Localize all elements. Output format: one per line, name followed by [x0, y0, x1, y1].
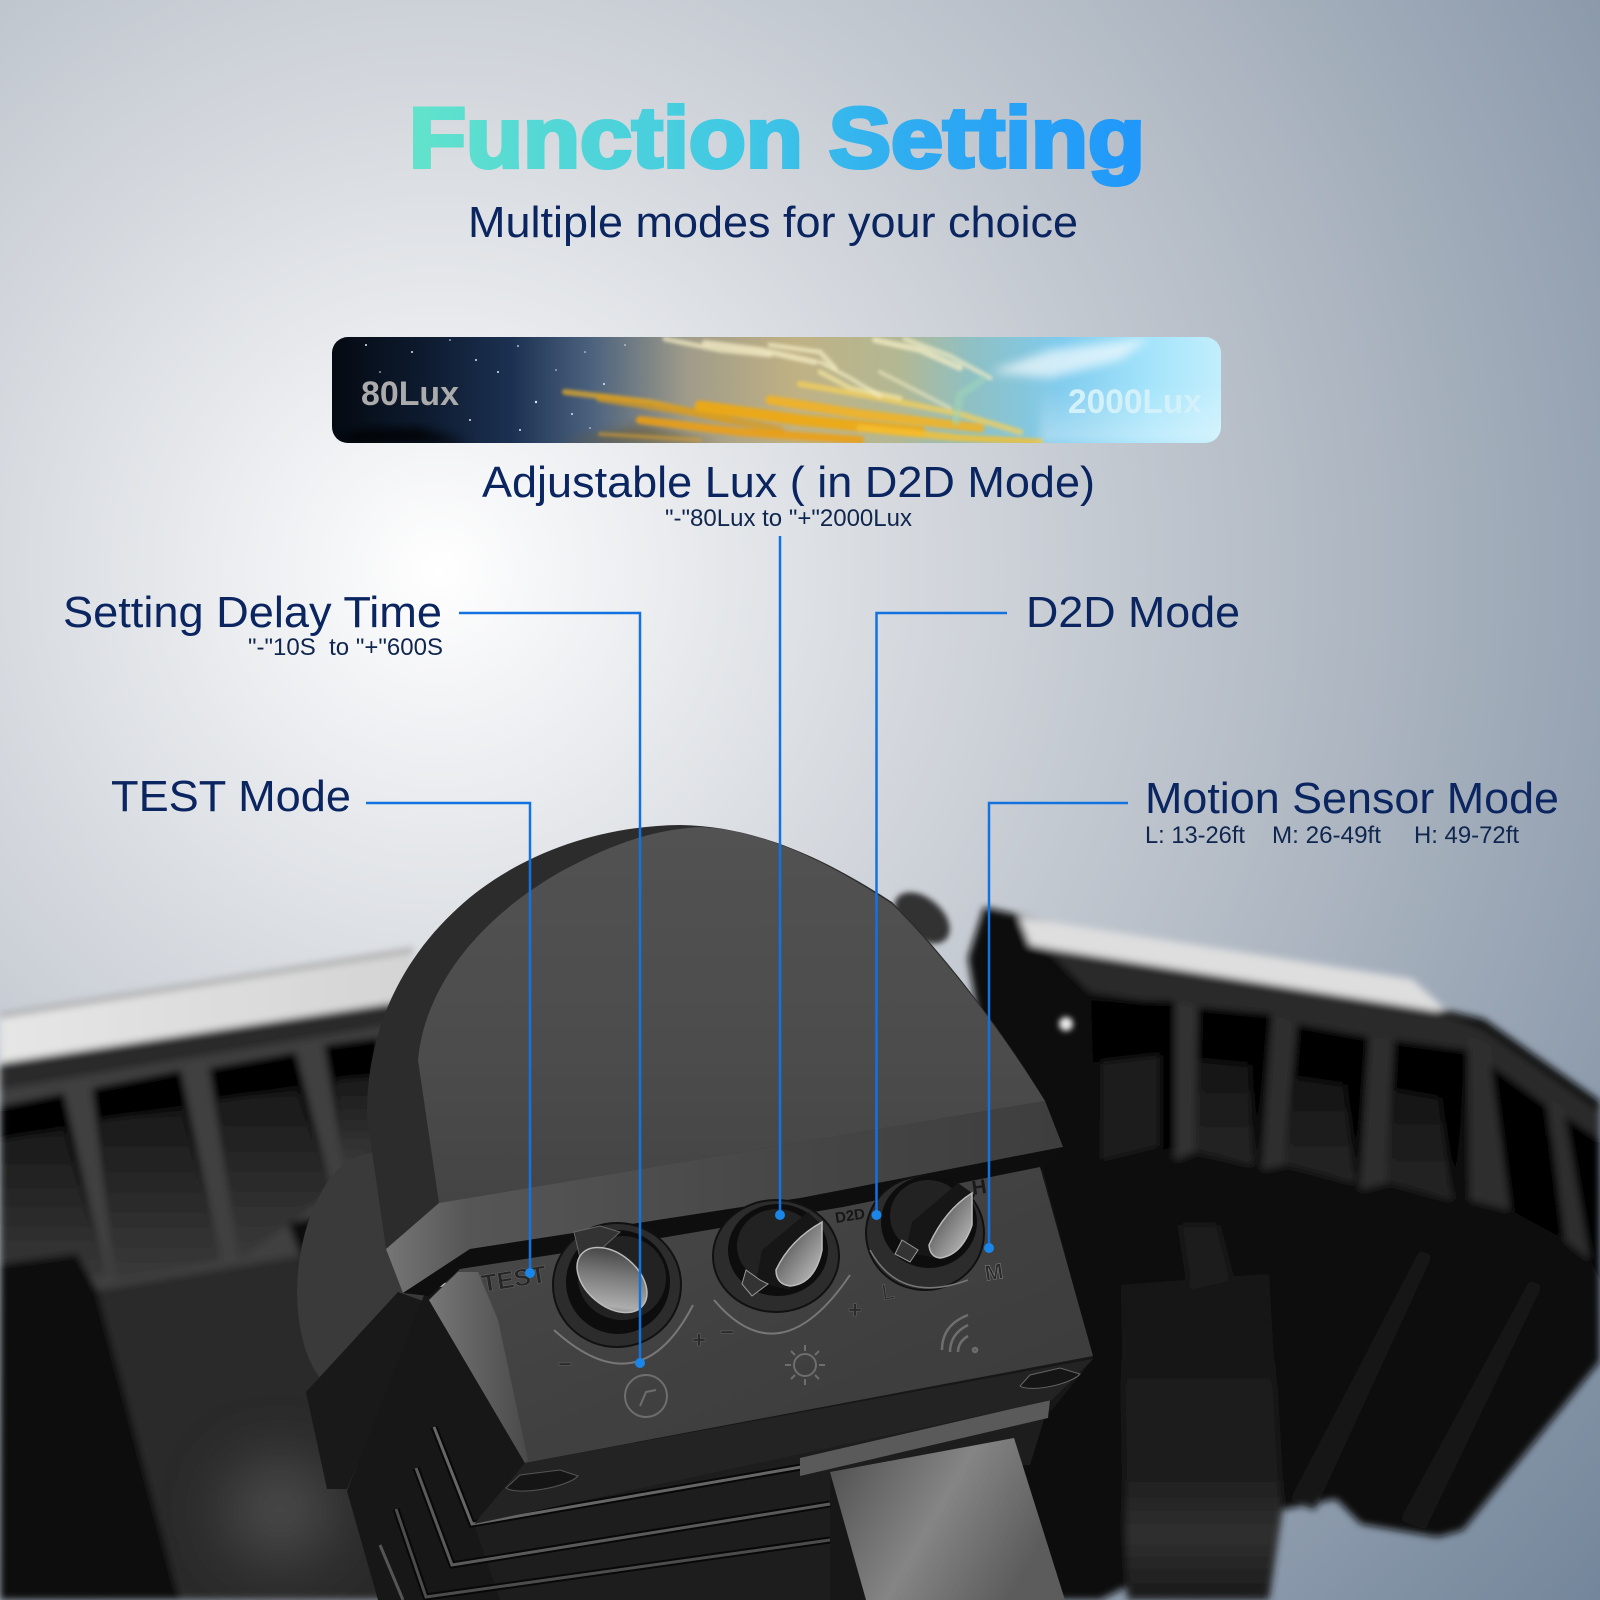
heading: adjustable lux: Adjustable Lux ( in D2D Mode) — [482, 458, 1095, 507]
heading: setting delay time: Setting Delay Time — [63, 588, 442, 637]
dome face — [418, 827, 1045, 1203]
left bracket highlight — [225, 1460, 335, 1560]
golden cloud streaks — [565, 372, 1040, 442]
motion sensor housing — [286, 825, 1093, 1600]
heading: adjustable lux — [482, 458, 1095, 532]
control panel — [429, 1167, 1093, 1463]
heading: test mode: TEST Mode — [111, 772, 351, 821]
rear disc — [286, 1147, 438, 1403]
lower rail — [800, 1400, 1050, 1476]
panel markings: − — [720, 1319, 734, 1346]
hood band — [386, 1101, 1063, 1293]
darker lower sky — [560, 425, 720, 443]
heading: adjustable lux: "-"80Lux to "+"2000Lux — [665, 505, 912, 532]
heading: d2d mode: D2D Mode — [1026, 588, 1240, 637]
stars — [365, 339, 626, 431]
panel markings: TEST — [480, 1261, 548, 1298]
bolt highlight — [1059, 1017, 1073, 1031]
panel bevel — [429, 1272, 528, 1463]
panel lip — [474, 1359, 1093, 1524]
heading: motion sensor mode: Motion Sensor Mode — [1145, 774, 1559, 823]
panel markings: − — [558, 1351, 572, 1378]
small bump behind dome — [885, 882, 959, 954]
panel markings: + — [848, 1297, 862, 1324]
panel markings: H — [970, 1176, 988, 1200]
white cloud wisps — [665, 339, 990, 408]
mounting stem — [830, 1438, 1065, 1600]
left floodlight (blurred) — [0, 948, 440, 1600]
panel markings: + — [692, 1327, 706, 1354]
line: motion sensor — [989, 803, 1128, 1248]
knob 1: delay time — [553, 1223, 693, 1364]
line: delay time — [459, 613, 640, 1363]
dome outer — [367, 825, 1063, 1293]
line: d2d — [876, 613, 1007, 1215]
panel markings: M — [983, 1258, 1005, 1286]
heading: setting delay time — [63, 588, 443, 661]
panel: lux gradient bar — [332, 337, 1230, 443]
label: 2000Lux: 2000Lux — [1068, 383, 1202, 421]
screw holes — [506, 1470, 578, 1491]
heading: setting delay time: "-"10S to "+"600S — [248, 634, 443, 661]
callout dots — [525, 1210, 994, 1368]
knob 3: motion sensor — [866, 1176, 984, 1290]
dark side face — [306, 1292, 426, 1489]
icon: clock — [625, 1375, 667, 1417]
knob 2: lux — [713, 1200, 850, 1334]
icon: sun — [785, 1345, 825, 1385]
label: 80Lux: 80Lux — [361, 375, 459, 413]
right floodlight (blurred) — [968, 907, 1600, 1600]
heading: motion sensor mode: L: 13-26ft — [1145, 822, 1245, 849]
blue sky clouds — [990, 338, 1150, 378]
ribbed lower block — [380, 1400, 1050, 1600]
line: lux — [779, 536, 781, 1215]
heading: motion sensor mode: H: 49-72ft — [1414, 822, 1519, 849]
icon: motion waves — [942, 1315, 977, 1352]
heading: motion sensor mode: M: 26-49ft — [1272, 822, 1381, 849]
panel markings: L — [880, 1278, 896, 1305]
subtitle: Multiple modes for your choice — [468, 198, 1078, 247]
shadow gap — [403, 1147, 1063, 1296]
dark underlay — [347, 1160, 1093, 1600]
title: Function Setting — [409, 91, 1145, 186]
heading: motion sensor mode — [1145, 774, 1559, 849]
panel markings: D2D — [834, 1205, 866, 1227]
line: test mode — [366, 803, 530, 1273]
callout lines — [366, 536, 1128, 1363]
panel markings — [480, 1176, 1005, 1378]
